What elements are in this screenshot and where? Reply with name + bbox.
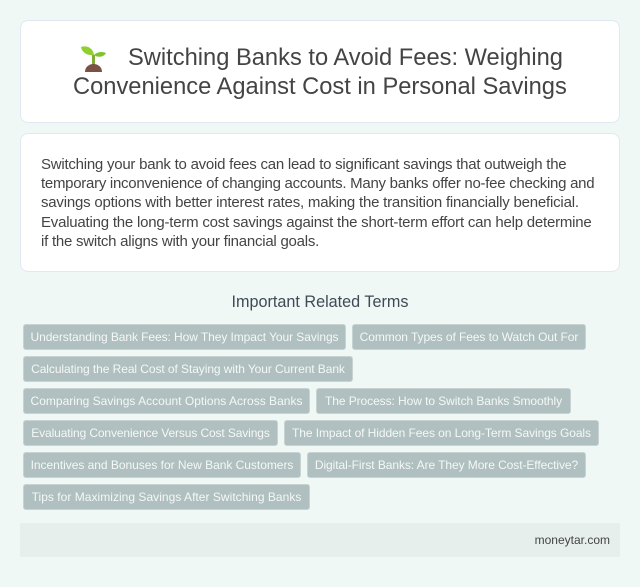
tag xyxy=(23,452,301,478)
tag xyxy=(23,484,310,510)
tag: Digital-First Banks: Are They More Cost-Effective? xyxy=(315,458,578,472)
tag: The Impact of Hidden Fees on Long-Term Savings Goals xyxy=(292,426,591,440)
tag: The Process: How to Switch Banks Smoothly xyxy=(325,394,562,408)
paragraph line 2: temporary inconvenience of changing accounts. Many banks offer no-fee checking and xyxy=(41,175,594,192)
tag: Common Types of Fees to Watch Out For xyxy=(360,330,578,344)
tag xyxy=(316,388,571,414)
tag xyxy=(23,356,353,382)
tag list xyxy=(23,324,599,510)
title line 2: Convenience Against Cost in Personal Savings xyxy=(73,74,567,100)
tag: Calculating the Real Cost of Staying with Your Current Bank xyxy=(31,362,345,376)
icon: sprout xyxy=(81,46,106,72)
tag xyxy=(352,324,586,350)
footer bar xyxy=(20,523,620,557)
tag xyxy=(23,388,310,414)
panel: title xyxy=(20,20,620,123)
title line 1: Switching Banks to Avoid Fees: Weighing xyxy=(128,45,563,71)
tag xyxy=(23,324,346,350)
tag xyxy=(307,452,586,478)
footer source: moneytar.com xyxy=(535,533,610,547)
tag: Understanding Bank Fees: How They Impact Your Savings xyxy=(30,330,338,344)
heading: related terms: Important Related Terms xyxy=(232,293,408,311)
tag xyxy=(23,420,278,446)
paragraph line 1: Switching your bank to avoid fees can lead to significant savings that outweigh the xyxy=(41,156,566,172)
tag: Incentives and Bonuses for New Bank Customers xyxy=(31,458,293,472)
tag xyxy=(284,420,599,446)
tag: Tips for Maximizing Savings After Switching Banks xyxy=(32,490,301,504)
paragraph line 5: if the switch aligns with your financial goals. xyxy=(41,233,319,250)
paragraph line 3: savings options with better interest rates, making the transition financially beneficial. xyxy=(41,194,579,211)
tag: Comparing Savings Account Options Across Banks xyxy=(31,394,302,408)
panel: intro paragraph xyxy=(20,133,620,272)
tag: Evaluating Convenience Versus Cost Savings xyxy=(31,426,270,440)
paragraph line 4: Evaluating the long-term cost savings against the short-term effort can help determine xyxy=(41,214,592,231)
